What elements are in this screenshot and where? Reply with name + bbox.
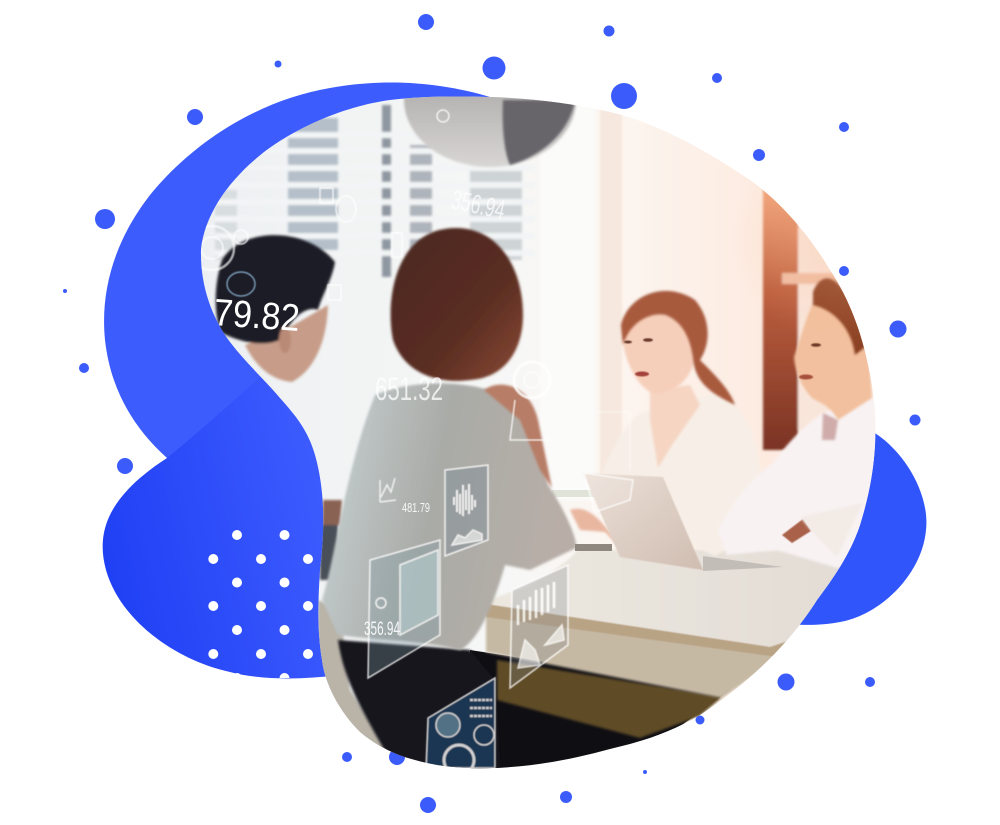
map panel xyxy=(400,550,438,635)
left man xyxy=(216,235,335,420)
woman from behind: hair xyxy=(391,228,523,381)
table apron xyxy=(486,612,790,698)
panels xyxy=(445,465,488,556)
window blinds xyxy=(215,100,622,505)
circular readouts xyxy=(436,713,460,737)
bar chart xyxy=(518,582,554,625)
photo: team meeting xyxy=(200,96,876,768)
overlay number: 481.79: 481.79 xyxy=(402,500,430,515)
holographic overlays xyxy=(190,110,633,775)
warm light flare xyxy=(776,226,858,328)
blob: lower blue shape xyxy=(103,375,340,678)
man at table: hair xyxy=(813,278,868,355)
table edge xyxy=(486,604,786,656)
woman at table: hair xyxy=(621,291,735,405)
man at table: hands and paper xyxy=(782,519,811,543)
play icon xyxy=(437,110,449,122)
woman from behind: shirt xyxy=(322,383,576,650)
chart line xyxy=(380,478,396,502)
woman at table: neck xyxy=(650,385,700,468)
overlay number: 79.82: 79.82 xyxy=(212,292,301,340)
brain icon xyxy=(227,272,255,296)
wall background xyxy=(195,90,880,775)
table surface xyxy=(486,550,860,650)
mail icons xyxy=(328,285,341,300)
waveform xyxy=(454,484,475,516)
under table xyxy=(470,650,730,770)
laptop base xyxy=(703,556,783,571)
small device xyxy=(575,544,612,551)
man at table: eye and mouth xyxy=(799,343,821,380)
woman at table: blouse xyxy=(604,441,722,556)
overlay number: 651.32: 651.32 xyxy=(375,371,443,407)
woman at table: face xyxy=(622,313,697,394)
woman from behind: trousers xyxy=(338,640,500,770)
woman from behind: raised hand xyxy=(484,385,552,488)
orange window column xyxy=(761,189,840,452)
blob: upper blue shape xyxy=(104,82,490,458)
woman at table: arm xyxy=(569,507,614,543)
man at table: shirt xyxy=(718,395,880,568)
ceiling sphere xyxy=(402,96,577,168)
woman at table: eyes and lips xyxy=(624,338,653,376)
table far section xyxy=(552,490,598,497)
man at table: face xyxy=(794,302,872,420)
target rings xyxy=(202,225,236,271)
laptop lid xyxy=(583,473,703,570)
dial xyxy=(514,362,550,398)
blob: right blue shape xyxy=(790,430,926,625)
dot grid on lower blob xyxy=(208,530,313,678)
seated person far left xyxy=(318,500,395,760)
overlay number: 356.94 lower: 356.94 xyxy=(364,619,400,640)
overlay number: 356.94 top: 356.94 xyxy=(449,185,508,225)
